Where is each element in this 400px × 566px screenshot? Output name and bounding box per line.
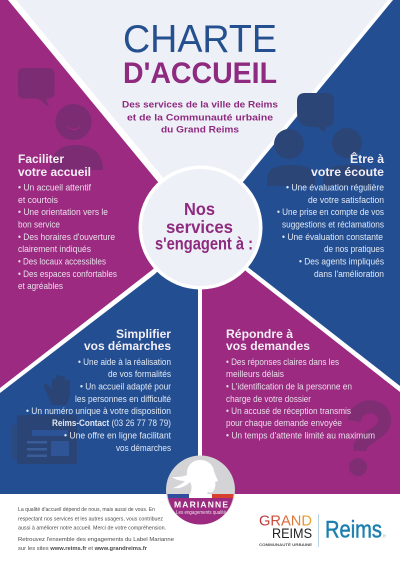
subtitle: Des services de la ville de Reims (122, 100, 278, 110)
icon: two people with speech bubble (267, 93, 372, 186)
text block: faciliter list: • Des espaces confortables (18, 269, 117, 279)
text block: demandes list: meilleurs délais (226, 369, 284, 379)
text block: demarches list: • Un numéro unique à votre disposition (26, 406, 171, 416)
panel: faciliter votre accueil (0, 0, 200, 388)
heading: repondre a vos demandes: Répondre à (226, 329, 294, 341)
logo: reims: Reims (325, 516, 382, 544)
logo: grand reims: COMMUNAUTÉ URBAINE (259, 542, 312, 547)
text block: demandes list: charge de votre dossier (226, 394, 311, 404)
central circle text (155, 199, 253, 254)
text block: faciliter list: • Une orientation vers le (18, 207, 108, 217)
heading: simplifier vos demarches: Simplifier (116, 329, 172, 341)
text block: demandes list: pour chaque demande envoyée (226, 418, 342, 428)
heading: etre a votre ecoute: votre écoute (311, 167, 384, 179)
heading: etre a votre ecoute: Être à (350, 153, 385, 166)
heading: simplifier vos demarches (84, 329, 172, 353)
text block: faciliter list: • Des locaux accessibles (18, 256, 106, 266)
text block: demarches list: • Un accueil adapté pour (80, 382, 171, 392)
subtitle: et de la Communauté urbaine (127, 112, 273, 124)
text block: ecoute list: dans l'amélioration (314, 269, 384, 279)
text block: ecoute list: • Des agents impliqués (299, 256, 384, 266)
text block: faciliter list: clairement indiqués (18, 244, 91, 254)
heading: repondre a vos demandes: vos demandes (226, 341, 310, 353)
icon: newspaper (12, 415, 77, 464)
text block: faciliter list: • Des horaires d'ouverture (18, 232, 115, 242)
footer text: La qualité d'accueil dépend de nous, mais aussi de vous. En (18, 507, 155, 513)
title (123, 18, 277, 90)
text block: demarches list (26, 357, 171, 453)
text block: demarches list: vos démarches (116, 443, 171, 453)
text block: demarches list: Reims-Contact (03 26 77 78 79) (52, 418, 171, 428)
icon: smiling person with speech bubble (18, 68, 103, 170)
text block: demarches list: • Une aide à la réalisation (78, 357, 171, 367)
central circle text: s'engagent à : (155, 234, 253, 254)
logo: grand reims (259, 512, 312, 547)
footer text: sur les sites www.reims.fr et www.grandreims.fr (18, 546, 148, 552)
logo: reims: .fr (382, 534, 387, 538)
text block: faciliter list: • Un accueil attentif (18, 182, 91, 192)
heading: faciliter votre accueil: votre accueil (18, 167, 91, 179)
text block: demandes list (226, 357, 375, 440)
text block: faciliter list: bon service (18, 220, 60, 230)
text block: demarches list: les personnes en difficulté (75, 394, 171, 404)
text block: ecoute list: suggestions et réclamations (282, 220, 384, 230)
text block: ecoute list (277, 182, 384, 279)
panel: etre a votre ecoute (200, 0, 400, 386)
marianne profile (172, 460, 218, 494)
panel: repondre a vos demandes (202, 228, 400, 494)
footer text (18, 507, 174, 552)
central circle (138, 166, 262, 290)
text block: demandes list: • Un accusé de réception transmis (226, 406, 351, 416)
text block: ecoute list: • Une prise en compte de vos (277, 207, 384, 217)
heading: faciliter votre accueil (18, 154, 91, 179)
marianne badge (166, 456, 235, 524)
panel: simplifier vos demarches (0, 228, 200, 494)
title: D'ACCUEIL (123, 57, 277, 90)
marianne label (174, 500, 228, 516)
text block: ecoute list: de votre satisfaction (308, 195, 384, 205)
title: CHARTE (123, 18, 277, 61)
subtitle (122, 100, 278, 136)
top light triangle (16, 0, 388, 228)
heading: repondre a vos demandes (226, 329, 310, 353)
text block: faciliter list: et courtois (18, 195, 58, 205)
text block: faciliter list: et agréables (18, 281, 63, 291)
footer text: respectant nos services et les autres usagers, vous contribuez (18, 516, 163, 522)
logo: grand reims: REIMS (272, 525, 312, 541)
logo divider (318, 514, 319, 547)
heading: simplifier vos demarches: vos démarches (84, 341, 171, 353)
text block: demarches list: • Une offre en ligne facilitant (64, 430, 171, 440)
marianne label: Les engagements qualité (176, 510, 226, 516)
central circle text: services (166, 217, 233, 237)
subtitle: du Grand Reims (161, 124, 239, 136)
marianne label: MARIANNE (174, 500, 228, 510)
footer text: aussi à améliorer notre accueil. Merci de votre compréhension. (18, 526, 166, 532)
text block: ecoute list: • Une évaluation constante (282, 232, 383, 242)
text block: demarches list: de vos formalités (108, 369, 171, 379)
text block: ecoute list: • Une évaluation régulière (286, 182, 384, 192)
heading: etre a votre ecoute (311, 153, 385, 179)
icon: question mark (349, 407, 385, 476)
text block: ecoute list: de nos pratiques (324, 244, 384, 254)
footer text: Retrouvez l'ensemble des engagements du Label Marianne (18, 537, 174, 543)
logo: grand reims: GRAND (259, 512, 312, 530)
text block: demandes list: • L'identification de la personne en (226, 382, 352, 392)
text block: faciliter list (18, 182, 117, 291)
icon: raised hand (44, 375, 70, 405)
text block: demandes list: • Un temps d'attente limité au maximum (226, 430, 375, 440)
heading: faciliter votre accueil: Faciliter (18, 154, 65, 166)
central circle text: Nos (184, 199, 215, 219)
text block: demandes list: • Des réponses claires dans les (226, 357, 339, 367)
